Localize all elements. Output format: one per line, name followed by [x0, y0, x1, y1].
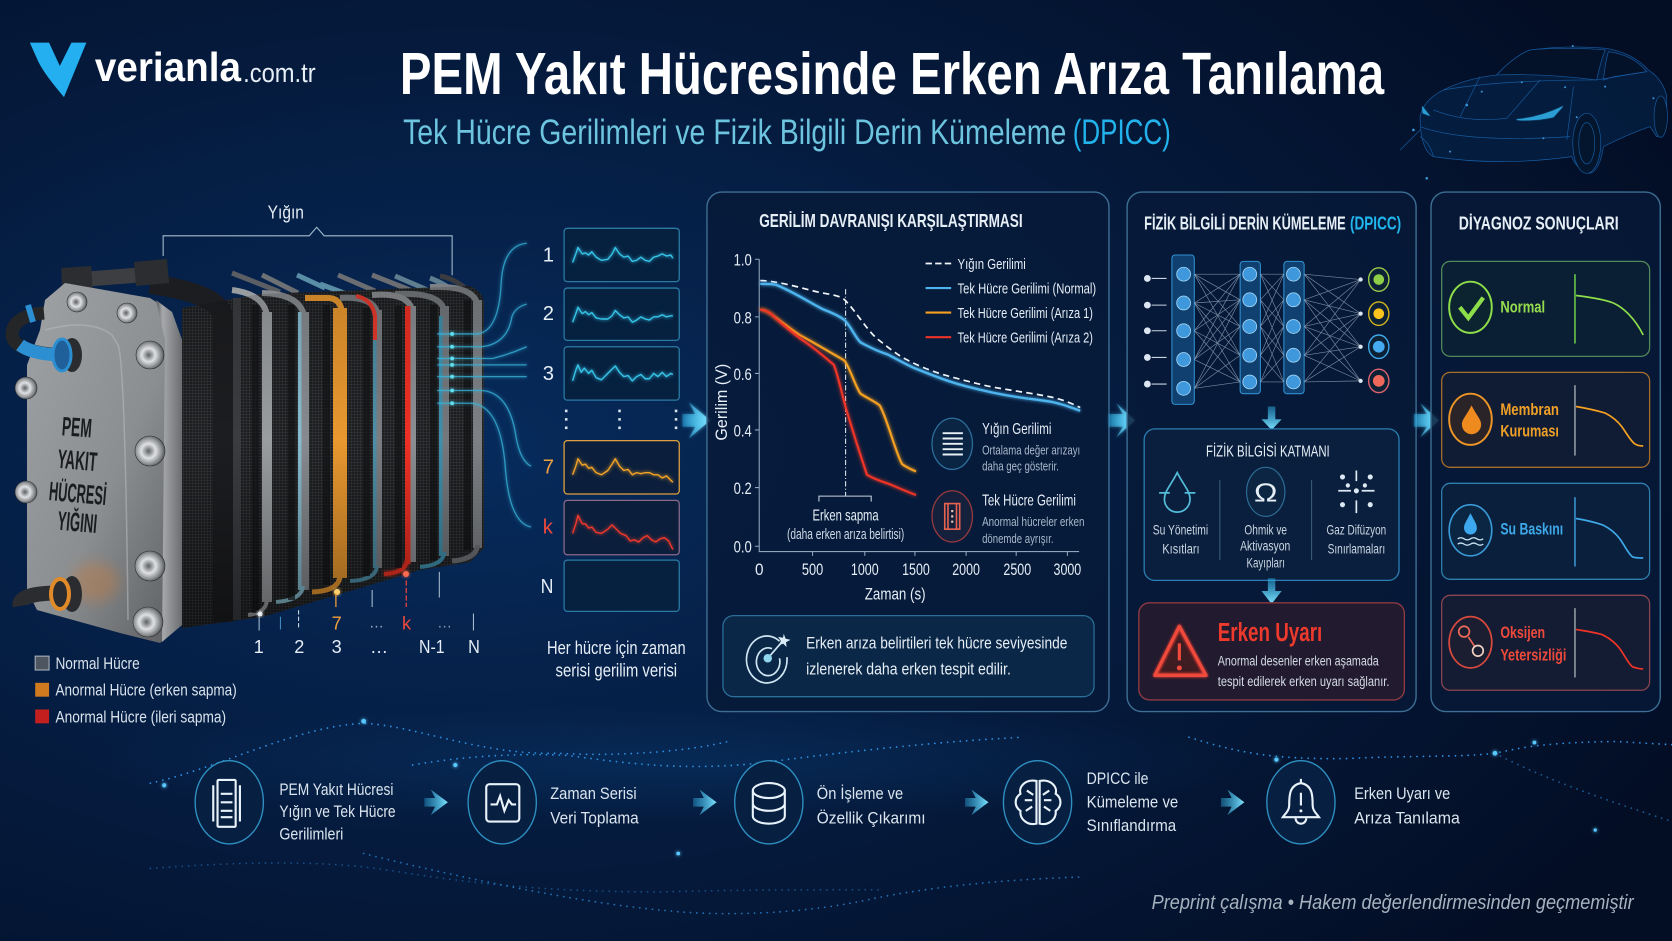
caption: series data	[547, 638, 686, 680]
label: gas diffusion	[1327, 522, 1386, 557]
chart legend: Tek Hücre Gerilimi (Arıza 2)	[958, 329, 1093, 346]
line chart: 3000	[1054, 560, 1081, 579]
series k	[543, 500, 679, 555]
icon: water drop	[1159, 473, 1195, 512]
step 2: time series data: Zaman Serisi	[550, 784, 637, 803]
result: oxygen starvation: Yetersizliği	[1500, 645, 1566, 664]
arrow 4	[1221, 790, 1244, 815]
cell index labels: 1	[254, 637, 264, 657]
panel heading: DİYAGNOZ SONUÇLARI	[1459, 213, 1619, 233]
fuel cell stack illustration: HÜCRESİ	[48, 476, 108, 511]
result: normal: Normal	[1500, 298, 1545, 317]
early warning box: Anormal desenler erken aşamada	[1218, 653, 1379, 669]
note: stack voltage: Ortalama değer arızayı	[982, 442, 1080, 457]
step 1: stack and cells: PEM Yakıt Hücresi	[279, 780, 393, 799]
line chart: 1500	[902, 560, 930, 579]
stack frames	[150, 273, 484, 628]
callout: early detection: izlenerek daha erken tespit edilir.	[806, 659, 1011, 678]
note: single cell voltage: Anormal hücreler erken	[982, 514, 1084, 529]
note: single cell voltage	[932, 491, 1084, 546]
step 3: preprocessing: Ön İşleme ve	[817, 784, 903, 803]
legend: cell types: Normal Hücre	[55, 654, 140, 673]
chart legend	[926, 256, 1096, 346]
vertical ellipsis dots	[566, 410, 676, 433]
line chart: Zaman (s)	[865, 585, 926, 604]
title: PEM Yakıt Hücresinde Erken Arıza Tanılama	[400, 40, 1385, 107]
panel heading: FİZİK BİLGİLİ DERİN KÜMELEME	[1144, 213, 1346, 233]
step 3: preprocessing	[735, 761, 926, 844]
label: ohmic losses	[1240, 522, 1290, 571]
subtitle: (DPICC)	[1073, 113, 1171, 152]
cell index labels	[254, 572, 480, 657]
series 7: 7	[543, 457, 554, 479]
cell index labels: N	[468, 637, 480, 657]
label: water management: Kısıtları	[1162, 541, 1200, 557]
process flow	[195, 761, 1460, 844]
line chart	[712, 251, 1081, 604]
caption: series data: serisi gerilim verisi	[556, 660, 677, 680]
logo: verianla.com.tr	[30, 43, 316, 97]
line chart: 0	[755, 560, 763, 579]
cell index labels: 7	[332, 613, 342, 633]
series 1	[543, 228, 679, 282]
panel: voltage comparison	[707, 192, 1109, 712]
arrow: chart to DPICC	[1109, 403, 1135, 437]
step 2: time series data: Veri Toplama	[550, 809, 639, 828]
end plate	[27, 283, 182, 643]
arrow 3	[965, 790, 988, 815]
arrow: network to physics	[1261, 406, 1282, 430]
step 4: clustering	[1003, 761, 1178, 844]
label: Yığın bracket	[163, 203, 452, 275]
step 4: clustering: Sınıflandırma	[1087, 816, 1177, 835]
note: stack voltage: daha geç gösterir.	[982, 458, 1059, 474]
icon: wireframe car	[1400, 45, 1667, 180]
series N: N	[541, 576, 553, 598]
physics layer: FİZİK BİLGİSİ KATMANI	[1206, 443, 1330, 461]
result: normal	[1442, 261, 1650, 356]
step 2: time series data	[468, 761, 639, 844]
line chart: 500	[802, 560, 823, 579]
step 1: stack and cells: Gerilimleri	[279, 825, 343, 844]
step 5: early warning	[1267, 761, 1460, 844]
note: stack voltage	[932, 418, 1080, 474]
cell index labels: 2	[294, 637, 304, 657]
cell index labels: N-1	[419, 637, 445, 657]
line chart: 0.4	[734, 421, 752, 440]
result: membrane drying: Kuruması	[1500, 421, 1559, 440]
step 4: clustering: Kümeleme ve	[1087, 793, 1178, 812]
step 4: clustering: DPICC ile	[1087, 769, 1148, 788]
arrow: physics to warning	[1261, 578, 1282, 604]
icon: warning triangle	[1155, 626, 1206, 675]
line chart: 1000	[851, 560, 879, 579]
label: water management: Su Yönetimi	[1153, 522, 1208, 538]
cell index labels: k	[402, 613, 412, 633]
line chart: 2500	[1003, 560, 1031, 579]
panel: diagnosis results	[1431, 192, 1660, 712]
panel heading: GERİLİM DAVRANIŞI KARŞILAŞTIRMASI	[759, 211, 1023, 231]
annotation: early deviation	[787, 508, 904, 543]
result: flooding: Su Baskını	[1500, 520, 1563, 539]
series N	[541, 560, 679, 611]
series 2: 2	[543, 303, 554, 325]
logo: verianla.com.tr: verianla	[95, 44, 241, 90]
early warning box	[1139, 603, 1404, 700]
cell index labels: 3	[332, 637, 342, 657]
step 1: stack and cells: Yığın ve Tek Hücre	[279, 802, 396, 821]
line chart: Gerilim (V)	[712, 364, 731, 441]
result: flooding	[1442, 483, 1650, 579]
step 5: early warning: Erken Uyarı ve	[1354, 784, 1450, 803]
panel heading: (DPICC)	[1350, 213, 1401, 233]
caption: series data: Her hücre için zaman	[547, 638, 686, 658]
time series column	[541, 228, 679, 611]
label: ohmic losses: Kayıpları	[1247, 555, 1285, 571]
step 3: preprocessing: Özellik Çıkarımı	[817, 809, 926, 828]
early warning box: Erken Uyarı	[1218, 619, 1322, 647]
line chart: 0.6	[734, 365, 752, 384]
legend: cell types: Anormal Hücre (erken sapma)	[55, 681, 237, 700]
annotation: early deviation: Erken sapma	[813, 508, 879, 525]
icon: ohmic	[1247, 467, 1285, 516]
label: ohmic losses: Ohmik ve	[1244, 522, 1287, 538]
top hose	[62, 271, 168, 281]
series 2	[543, 288, 679, 340]
legend: cell types: Anormal Hücre (ileri sapma)	[55, 707, 226, 726]
line chart: 1.0	[734, 251, 752, 270]
chart legend: Tek Hücre Gerilimi (Arıza 1)	[958, 305, 1093, 322]
line chart: 0.0	[734, 538, 752, 557]
arrow: DPICC to diagnosis	[1414, 403, 1438, 437]
label: gas diffusion: Sınırlamaları	[1328, 541, 1385, 557]
series 3	[543, 347, 679, 400]
step 1: stack and cells	[195, 761, 396, 844]
fuel cell stack illustration	[12, 271, 484, 643]
line chart: 0.2	[734, 479, 752, 498]
stack name on plate	[48, 411, 108, 539]
logo: verianla.com.tr: .com.tr	[243, 58, 316, 88]
icon: gas diffusion	[1338, 470, 1374, 513]
panel: DPICC	[1127, 192, 1416, 712]
arrow 2	[693, 790, 717, 815]
label: gas diffusion: Gaz Difüzyon	[1327, 522, 1386, 538]
coolant hoses	[12, 305, 82, 372]
note: single cell voltage: dönemde ayrışır.	[982, 531, 1054, 546]
result: membrane drying: Membran	[1500, 400, 1559, 419]
early warning box: tespit edilerek erken uyarı sağlanır.	[1218, 673, 1389, 689]
chart legend: Tek Hücre Gerilimi (Normal)	[958, 280, 1096, 297]
cell index labels: …	[370, 637, 388, 657]
series 3: 3	[543, 363, 554, 385]
neural network diagram	[1144, 255, 1389, 404]
icon: ohmic: Ω	[1254, 479, 1277, 507]
label: ohmic losses: Aktivasyon	[1240, 538, 1290, 554]
subtitle: Tek Hücre Gerilimleri ve Fizik Bilgili Derin Kümeleme	[403, 113, 1066, 152]
chart legend: Yığın Gerilimi	[958, 256, 1026, 273]
callout: early detection	[723, 616, 1094, 697]
arrow: series to chart	[682, 402, 710, 438]
stack name on plate: YIĞINI	[56, 506, 98, 539]
line chart: 0.8	[734, 308, 752, 327]
callout: early detection: Erken arıza belirtileri tek hücre seviyesinde	[806, 634, 1067, 653]
label: water management	[1153, 522, 1208, 557]
bolts	[15, 292, 165, 637]
note: stack voltage: Yığın Gerilimi	[982, 421, 1051, 438]
note: single cell voltage: Tek Hücre Gerilimi	[982, 493, 1076, 510]
step 5: early warning: Arıza Tanılama	[1354, 809, 1460, 828]
legend: cell types	[35, 654, 237, 726]
label: Yığın bracket: Yığın	[268, 203, 304, 223]
stack name on plate: YAKIT	[56, 444, 98, 477]
series 1: 1	[543, 244, 554, 266]
signal wires from stack to series	[437, 243, 531, 527]
cell index labels: …	[437, 614, 452, 631]
series k: k	[543, 516, 554, 538]
series 7	[543, 441, 679, 494]
result: oxygen starvation	[1442, 595, 1650, 690]
annotation: early deviation: (daha erken arıza belirtisi)	[787, 527, 904, 543]
line chart: 2000	[952, 560, 980, 579]
cell index labels: …	[369, 614, 384, 631]
result: membrane drying	[1442, 372, 1650, 467]
result: oxygen starvation: Oksijen	[1500, 623, 1545, 642]
physics layer	[1144, 429, 1399, 580]
arrow 1	[424, 790, 448, 815]
stack name on plate: PEM	[61, 411, 93, 443]
logo mark	[30, 43, 86, 97]
